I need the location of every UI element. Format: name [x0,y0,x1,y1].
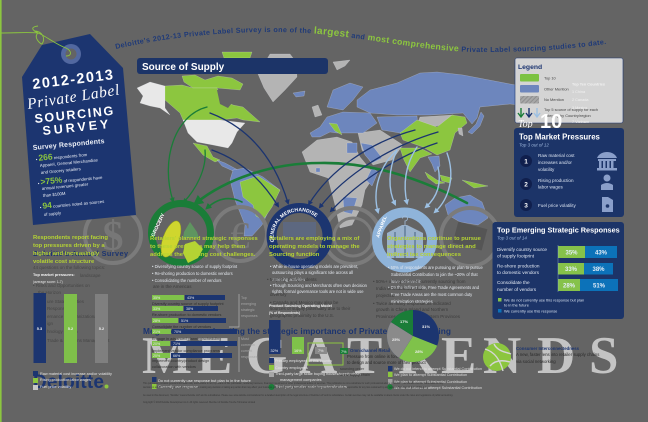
chart: sourcing operating model: Third party smaller scale importers/brokers [275,385,347,389]
chart: top market pressures bars: 5.3 [37,326,43,331]
Mexico [193,143,220,162]
text block: omnichannel retailing: sourcing order [340,367,365,371]
text block: survey topics: hnology & Tech [47,329,78,334]
icon: fuel can [602,197,613,212]
grocery badge [150,204,210,263]
chart: emerging responses bars: Engage in advanced planning/scheduling [152,337,221,341]
tag respondent facts: Apparel, General Merchandise [40,157,99,168]
text block: omnichannel retailing: to design and source more of their product [347,360,427,365]
legal disclaimer: As used in this document, "Deloitte" means Deloitte LLP and its subsidiaries. Please see www.deloitte.com/us/about for a detailed description of the legal structure of Deloitte LLP and its subsidiaries. Certain services may not be available to attest clients under the rules and regulations of public accounting. [143,394,453,397]
text block: general merchandise: Sourcing function [269,252,320,258]
tag: survey card [0,26,136,225]
Italy [329,123,342,135]
chart: sourcing operating model: Product Sourcing Operating Model [269,304,332,308]
chart: emerging responses bars: 38% [186,307,194,311]
top ten overlay: Top Ten Countries [572,82,605,86]
chart: emerging responses bars: emerging [241,302,256,306]
watermark currency rings: $ [102,214,124,260]
icon: hops [183,241,203,263]
chart: emerging responses bars: Diversify country source of supply footprint [152,302,224,306]
panel: legend: Top 5 source of supply for each [544,107,598,112]
legend: tax pie: We plan to attempt Substantial Contribution [394,380,467,384]
heading: megatrends: Megatrends are elevating the strategic importance of Private Label Sourcing [143,326,451,336]
panel: legend: No Mention [544,97,564,102]
panel: top market pressures: Top 3 out of 12 [519,142,549,148]
chart: emerging responses bars: collaboration with vendors [152,365,196,369]
chart: emerging responses bars: Re-shore production to domestic vendors [152,313,222,317]
tag title: 2012-2013 [32,67,114,93]
watermark currency rings: € [230,215,250,257]
chart: top market pressures bars: Top market pressures: [33,272,75,277]
chart: emerging responses bars: 28% [153,319,161,323]
text block: apparel: Organizations continue to pursue [387,236,482,242]
chart: emerging responses bars: common [241,343,255,347]
stacked bars: 38% [592,267,605,273]
Svalbard [333,60,350,70]
text block: grocery [150,236,259,289]
stacked bars: 35% [565,250,578,256]
panel: top emerging strategic responses: We currently use this response [504,308,557,314]
text block: apparel [373,236,483,319]
panel: top market pressures: Rising production [538,178,574,183]
apparel badge: APPAREL [375,215,389,239]
Hudson Bay [217,90,235,108]
text block: apparel: minimization strategies [391,299,433,304]
panel: top market pressures: volatility [538,167,555,172]
text block: general merchandise: Sourcing activities [272,277,305,282]
text block: survey topics: ign [47,321,54,326]
panel: top market pressures [514,128,624,217]
panel: top emerging strategic responses: to domestic vendors [497,270,540,275]
chart: emerging responses bars [152,294,258,372]
chart: emerging responses bars: current [241,349,252,353]
panel: legend [515,58,623,133]
text block: apparel: • 50%+ of respondents currently sourcing from [373,279,466,284]
text block: apparel: Substantial Contribution to join the ~20% of that [391,272,478,277]
tag title: SURVEY [42,117,110,138]
South America [230,168,280,236]
chart: tax pie: 25% [392,337,400,342]
chart: top market pressures bars: 5.2 [99,326,105,331]
chart: emerging responses bars: Most [241,337,249,341]
chart: sourcing operating model: 16% [294,349,302,353]
text block: apparel: Free Trade Areas are the most common duty [391,292,473,297]
chart: sourcing operating model: Third-party large scale buying houses/supply chain [275,372,360,376]
text block: grocery: • Re-shoring production to domestic vendors [152,271,233,276]
chart: emerging responses bars: 43% [187,296,195,300]
text block: grocery: Retailers' planned strategic responses [150,236,259,242]
stacked bars [558,245,618,292]
chart: tax pie: 28% [415,349,423,354]
panel: top emerging strategic responses: to in the future [504,302,529,308]
text block: respondents intro: top pressures driven by a [33,243,105,249]
tag respondent facts: of supply [44,210,62,217]
chart: sourcing operating model: 7% [318,349,324,353]
panel: top emerging strategic responses: Diversify country source [497,247,547,252]
general merchandise badge: GENERAL MERCHANDISE [270,208,318,242]
world map [137,52,545,236]
general merchandise badge [266,203,332,269]
panel: legend: Top 10 [544,76,557,80]
text block: general merchandise: rights, formal governance tools are not in wide use [272,289,364,294]
top ten overlay [572,82,605,124]
chart: emerging responses bars: 66% [173,354,181,358]
legal disclaimer: This publication contains general information only and Deloitte is not, by means of this publication, rendering business, financial, investment or other professional advice or services. This publication is not a substitute for such professional advice or services, nor should it be used as a basis for any [143,382,444,385]
legal disclaimer [143,382,453,404]
text block: general merchandise: • Canada and Mexico may also be [270,300,339,305]
stacked bars: 28% [563,284,576,290]
SE Asia [428,156,440,172]
text block: apparel: growth in China Inland and Northern [376,307,449,312]
legend: tax pie: We do not intend to attempt Substantial Contribution [394,386,482,390]
text block: omnichannel retailing [340,348,427,377]
icon: building [597,152,617,170]
text block: apparel: • Twice as many respondents indicated [373,301,451,306]
text block: general merchandise [267,236,368,318]
legend: emerging responses: Currently use response [158,384,198,389]
legend: tax pie [387,366,482,390]
text block: grocery: • Consolidating the number of vendors [152,278,221,283]
chart: emerging responses bars: 21% [153,330,161,334]
legend: tax pie: We plan to attempt Substantial Contribution [394,373,467,377]
text block: general merchandise: geographic proximity to the U.S. [270,313,334,318]
Greenland [258,54,297,102]
panel: legend: Other Mention [544,86,569,92]
panel: top market pressures: increases and/or [538,160,572,165]
chart: emerging responses bars: 35% [153,296,161,300]
tag respondent facts: and Grocery retailers [41,166,81,175]
tag respondent facts: than $100M [43,191,66,198]
tag title [25,67,120,138]
text block: grocery: to these pressures may help them [150,244,245,250]
panel: top market pressures: 2 [524,182,528,188]
Alaska [137,82,170,115]
text block: grocery: are in the Americas [153,284,192,289]
text block: general merchandise: operating models to manage the [269,244,360,250]
top ten overlay: 3 Mexico [572,106,587,110]
legend: market pressures: Fuel price volatility [40,385,71,389]
text block: survey topics: the Horizon [38,290,62,295]
icon: worker [601,174,613,190]
chart: emerging responses bars: 20% [153,342,161,346]
text block: consumer interconnectedness: via social networking [516,359,556,364]
chart: emerging responses bars: responses [241,314,258,318]
text block: respondents intro: Deloitte's Annual Survey [33,249,129,258]
text block: general merchandise: diversify [270,292,287,297]
text block: consumer interconnectedness [516,346,599,364]
tag respondent facts: annual revenues greater [42,181,89,191]
chart: top market pressures bars [33,272,108,363]
China [400,115,467,155]
chart: sourcing operating model: Country employees [275,366,308,370]
icon: legend arrows [518,108,540,117]
text block: general merchandise: • While in-house operating models are prevalent, [270,264,358,269]
chart: emerging responses bars: Implement vendor compliance programs [152,349,220,353]
chart: top market pressures bars: (average score: 1-7) [33,280,63,284]
legend: market pressures: Rising production labor wages [40,378,91,382]
panel: top market pressures: 3 [524,202,528,210]
text block: respondents intro: higher and increasingly [33,251,100,257]
Middle East [358,130,403,165]
Europe [310,112,377,137]
panel: top emerging strategic responses: number of vendors [497,287,537,292]
text block: survey topics: • Risks and Opportunities on [33,283,90,288]
legend: market pressures: Raw material cost increase and/or volatility [40,372,112,376]
legend: emerging responses: Do not currently use response but plan to in the future [158,378,251,383]
text block: consumer interconnectedness: Consumer Interconnectedness [516,346,580,351]
panel: top market pressures: 1 [524,158,528,166]
chart: emerging responses bars: Top [241,296,247,300]
text block: general merchandise: Retailers are employing a mix of [269,236,359,242]
chart: tax pie: 17% [400,319,408,324]
tag title: Private Label [25,82,120,113]
stacked bars: 43% [595,250,608,256]
curved headline: Deloitte's 2012-13 Private Label Survey is one of the largest and most comprehensive Private Label sourcing studies to date. [115,26,606,52]
legend: emerging responses [152,377,251,389]
text block: general merchandise: sources of supply potentially due to their [270,306,351,311]
icon: leaf [183,222,199,238]
text block: survey topics: Responses [47,306,70,311]
panel: legend: category by Country/region [544,113,591,118]
text block: apparel: Provinces than Coastal/Eastern Provinces [376,314,461,319]
UK [312,105,322,117]
text block: survey topics: landscape [80,273,101,278]
tag respondent facts: • 94 countries noted as sources [39,195,105,211]
text block: grocery: • Diversifying country source of supply footprint [152,264,238,269]
chart: emerging responses bars: 33% [153,307,161,311]
chart: emerging responses bars: responses [241,355,258,359]
tag respondent facts: • >75% of respondents have [37,171,103,187]
text block: apparel: • On the indirect side, Free Trade Agreements and [388,285,480,290]
text block: survey topics [33,265,110,343]
text block: omnichannel retailing: Pressure from online is forcing retailers [347,354,420,359]
panel: top market pressures: Fuel price volatility [538,203,576,208]
chart: emerging responses bars: 51% [181,319,189,323]
chart: emerging responses bars: strategic [241,308,255,312]
Arctic Canada [182,52,252,90]
panel: top emerging strategic responses: Consolidate the [497,280,530,285]
panel: top emerging strategic responses [492,222,624,319]
chart: sourcing operating model: 7% [341,350,347,354]
chart: tax pie: 31% [422,324,430,329]
panel: legend: Top [518,119,533,130]
panel: legend: Legend [518,64,542,71]
panel: top market pressures: labor wages [538,184,563,190]
panel: top emerging strategic responses: Top Emerging Strategic Responses [497,226,620,234]
chart: tax pie [387,310,439,362]
chart: top market pressures bars: 5.2 [68,326,74,331]
text block: apparel: projected [376,293,395,298]
India [400,148,432,172]
chart: emerging responses bars: Implement country/product design [152,359,209,363]
Korea [458,128,463,136]
panel: Source of Supply heading [137,58,328,74]
icon: suit on hanger [387,225,423,258]
chart: emerging responses bars: 70% [174,330,182,334]
text block: respondents intro: volatile cost structure [33,259,95,265]
top ten overlay: 2 Canada [572,98,589,102]
legal disclaimer: decision or action that may affect your business. Before making any decision or taking any action that may affect your business, you should consult a qualified professional advisor. Deloitte shall not be responsible for any loss sustained by any person who relies on this publication. [143,386,427,389]
text block: apparel: have achieved it [391,279,421,284]
chart: emerging responses bars: 20% [153,354,161,358]
chart: sourcing operating model: (% of Respondents) [269,311,300,315]
text block: general merchandise: outsourcing plays a significant role across all [272,270,353,275]
Central Asia [377,116,418,133]
watermark currency rings [85,207,499,266]
USA [183,120,245,148]
chart: sourcing operating model: management companies [280,378,322,382]
tag respondent facts [33,138,105,217]
text block: consumer interconnectedness: A new, faster lens into retailer supply chains [516,352,599,357]
panel: top market pressures: Top Market Pressures [519,132,601,142]
panel: top emerging strategic responses: Top 3 out of 14 [497,236,527,240]
text block: apparel: indirect tax consequences [387,252,462,258]
panel: top market pressures: Raw material cost [538,153,575,158]
chart: emerging responses bars: Consolidate the number of vendors [152,325,211,329]
big word: MEGATRENDS: MEGATRENDS [142,327,618,385]
legend: tax pie: We do not intend to attempt Substantial Contribution [394,367,482,371]
text block: apparel: strategies to manage direct and [387,244,476,250]
text block: apparel: • 50% of respondents are pursuing or plan to pursue [388,265,483,270]
text block: respondents intro: Respondents report facing [33,235,108,241]
text block: survey topics: 44 questions on the following topics: [33,265,105,270]
panel: legend: 10 [540,111,562,133]
text block: general merchandise: • Though Sourcing and Merchants often own decision [270,283,368,288]
apparel badge [375,212,432,268]
panel: top emerging strategic responses: Re-shore production [497,264,540,268]
tag title: SOURCING [34,104,114,126]
icon: consumer network [483,343,511,371]
Iceland [293,91,305,97]
text block: general merchandise: • Majority of respondents [267,277,317,282]
text block: omnichannel retailing: lines/supply chain [340,373,370,377]
text block: survey topics: Trade & Customs Management [47,338,110,343]
legal disclaimer: Copyright © 2013 Deloitte Development LLC. All rights reserved. Member of Deloitte Touche Tohmatsu Limited [143,401,256,404]
grocery badge: GROCERY [150,212,167,238]
Scandinavia [327,83,363,110]
Mongolia [418,115,458,127]
Canada [165,85,260,122]
top ten overlay: 1 China [572,90,586,94]
stacked bars: 33% [565,267,578,273]
Russia [357,72,545,124]
Indonesia [425,172,488,188]
Central America [217,160,238,171]
tag respondent facts: • 266 respondents from [35,148,88,163]
text block: apparel: India or Southeast Asia [376,286,423,291]
text block: survey topics: ure State Priorities [47,299,85,304]
chart: sourcing operating model: Primary employees of this country [275,359,332,363]
text block: omnichannel retailing: Omnichannel Retail [350,348,390,353]
supply arrows [168,107,467,212]
chart: sourcing operating model: 32% [270,349,279,353]
panel: Source of Supply heading: Source of Supply [142,62,225,73]
legend: market pressures [33,371,112,390]
stacked bars: 51% [593,284,606,290]
text block: respondents intro [33,235,129,265]
tag respondent facts: Survey Respondents [33,138,105,152]
text block: survey topics: ernance & Organizational [47,314,98,319]
Brazil [240,176,280,220]
top ten overlay: 7 Vietnam [572,120,589,124]
icon: corn [157,218,185,260]
panel: top emerging strategic responses: of supply footprint [497,254,535,258]
chart: emerging responses bars: 71% [173,342,181,346]
chart: sourcing operating model [268,304,360,390]
text block: grocery: address the ongoing cost challenges. [150,252,256,258]
Japan [468,112,484,134]
logo: Deloitte: Deloitte [33,372,104,393]
Australia [445,195,488,225]
Africa [302,137,375,228]
panel: top emerging strategic responses: We do not currently use this response but plan [504,298,584,302]
